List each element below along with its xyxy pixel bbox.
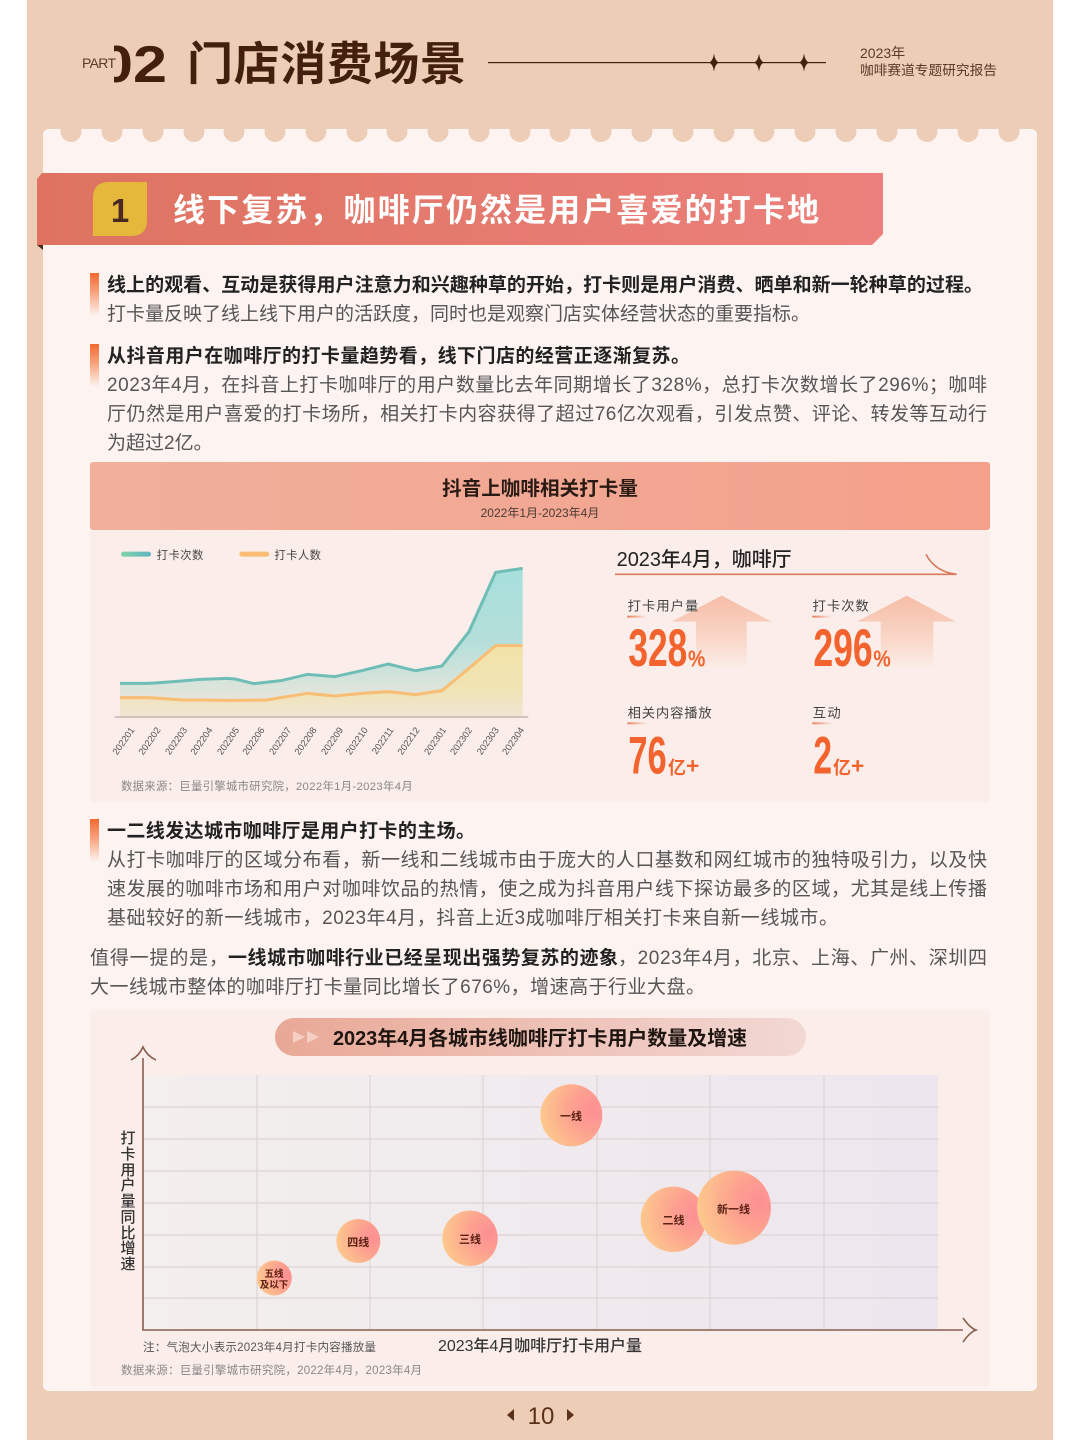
stat: content plays: 76 [628,726,667,785]
section number: PART [82,55,116,71]
section banner [37,173,883,250]
x axis labels: 202302 [448,725,474,757]
x axis label: 2023年4月咖啡厅打卡用户量 [438,1337,642,1355]
header [80,36,997,94]
bubble: tier 2: 二线 [662,1213,684,1227]
paragraph 2: 为超过2亿。 [107,432,213,454]
key figures [615,548,957,785]
x axis labels: 202204 [189,725,215,757]
bubble chart title: 2023年4月各城市线咖啡厅打卡用户数量及增速 [333,1026,747,1050]
y axis label: 用 [120,1162,136,1179]
y axis label: 户 [120,1177,136,1194]
chart header: 2022年1月-2023年4月 [481,506,599,520]
y axis label: 同 [120,1209,136,1226]
x axis labels: 202209 [319,725,345,757]
banner title: 线下复苏，咖啡厅仍然是用户喜爱的打卡地 [173,192,819,228]
stat: interactions: 2 [813,726,832,785]
stat: check-in users: % [688,646,706,672]
legend: 打卡人数 [274,548,321,562]
bubble chart title [275,1018,806,1056]
paragraph 4: 一线城市咖啡行业已经呈现出强势复苏的迹象 [228,946,618,969]
paragraph 1: 线上的观看、互动是获得用户注意力和兴趣种草的开始，打卡则是用户消费、晒单和新一轮种草的过程。 [107,273,983,296]
stat: check-in users: 328 [628,619,687,678]
axes with arrows [131,1047,976,1342]
y axis label: 比 [120,1225,136,1242]
stat: interactions: 亿 [833,758,851,778]
data source: 数据来源：巨量引擎城市研究院，2022年1月-2023年4月 [121,779,413,793]
stat: interactions: 互动 [813,705,841,720]
bubble: new tier 1: 新一线 [717,1202,750,1216]
bubble: tier 5 and below [257,1260,292,1296]
x axis labels: 202207 [267,725,293,757]
legend: 打卡次数 [157,548,203,562]
paragraph 4 [90,946,987,998]
report name [860,45,997,78]
bubble: tier 3 [442,1211,498,1266]
badge number [93,182,147,236]
bubble: tier 1: 一线 [560,1109,582,1123]
chart panel: bubble chart [90,1010,990,1386]
plot grid [143,1075,938,1330]
header line with stars [488,54,826,72]
paragraph 2: 厅仍然是用户喜爱的打卡场所，相关打卡内容获得了超过76亿次观看，引发点赞、评论、转发等互动行 [107,403,987,425]
arrow 2 [857,596,956,670]
x axis labels: 202303 [475,725,501,757]
paragraph 1: 打卡量反映了线上线下用户的活跃度，同时也是观察门店实体经营状态的重要指标。 [107,303,810,325]
figures heading [615,548,957,574]
figures heading: 2023年4月，咖啡厅 [617,548,792,571]
line chart [111,548,528,793]
paragraph 4: ，2023年4月，北京、上海、广州、深圳四 [618,947,987,969]
x axis labels: 202304 [500,725,526,757]
stat: interactions: + [851,753,864,778]
x axis labels: 202301 [422,725,448,757]
x axis labels: 202208 [293,725,319,757]
x axis labels: 202203 [163,725,189,757]
stat: check-in count: 打卡次数 [813,599,869,614]
bubble: tier 5 and below: 及以下 [260,1280,289,1291]
x axis labels: 202201 [111,725,137,757]
x axis labels: 202210 [344,725,370,757]
stat: check-in count: % [873,646,891,672]
x axis labels: 202211 [370,725,396,756]
stat: content plays: 相关内容播放 [628,704,712,720]
chart header [90,462,990,530]
chart panel: check-in volume [90,462,990,802]
bubble: tier 4 [336,1219,380,1263]
paragraph 1 [90,273,983,325]
paragraph 4: 值得一提的是， [90,947,228,969]
y axis label: 卡 [120,1146,136,1163]
y axis label: 增 [120,1239,136,1257]
arrow 1 [672,596,772,670]
x axis labels: 202202 [137,725,163,757]
page number [507,1403,574,1430]
chart header: 抖音上咖啡相关打卡量 [442,477,638,500]
paragraph 4: 大一线城市整体的咖啡厅打卡量同比增长了676%，增速高于行业大盘。 [90,976,705,998]
paragraph 3: 速发展的咖啡市场和用户对咖啡饮品的热情，使之成为抖音用户线下探访最多的区域，尤其是线上传播 [107,878,987,900]
paragraph 3: 从打卡咖啡厅的区域分布看，新一线和二线城市由于庞大的人口基数和网红城市的独特吸引力，以及快 [107,849,987,871]
page number: 10 [528,1403,554,1430]
paragraph 2: 从抖音用户在咖啡厅的打卡量趋势看，线下门店的经营正逐渐复苏。 [107,344,690,367]
badge number: 1 [111,192,129,229]
bubble note: 注：气泡大小表示2023年4月打卡内容播放量 [143,1340,376,1354]
x axis labels [111,725,526,757]
report name: 咖啡赛道专题研究报告 [860,63,997,78]
stat: check-in users [627,598,706,678]
stat: content plays: + [686,753,699,778]
bubble data source: 数据来源：巨量引擎城市研究院，2022年4月，2023年4月 [121,1363,422,1377]
paragraph 2: 2023年4月，在抖音上打卡咖啡厅的用户数量比去年同期增长了328%，总打卡次数增长了296%；咖啡 [107,374,987,396]
report name: 2023年 [860,45,905,61]
section number: 02 [99,36,167,94]
paragraph 3 [90,819,987,929]
legend [121,548,321,562]
stat: content plays [627,704,712,785]
x axis labels: 202205 [215,725,241,757]
bubble: tier 5 and below: 五线 [264,1268,284,1280]
y axis label: 打 [120,1130,136,1147]
stat: check-in count [812,599,891,678]
x axis labels: 202206 [241,725,267,757]
stat: interactions [812,705,864,785]
paragraph 3: 一二线发达城市咖啡厅是用户打卡的主场。 [107,819,475,842]
paragraph 3: 基础较好的新一线城市，2023年4月，抖音上近3成咖啡厅相关打卡来自新一线城市。 [107,907,838,929]
bubble: tier 1 [540,1084,602,1146]
paragraph 2 [90,344,987,454]
bubble: tier 2 [641,1187,706,1252]
stat: check-in users: 打卡用户量 [628,598,698,614]
title: 门店消费场景 [187,38,466,90]
x axis labels: 202212 [396,725,422,757]
bubble: new tier 1 [697,1171,771,1245]
y axis label: 量 [120,1193,136,1210]
section number [80,36,167,94]
y axis label: 速 [120,1256,136,1273]
stat: content plays: 亿 [668,758,686,778]
stat: check-in count: 296 [813,619,873,678]
y axis label [120,1130,136,1273]
bubble: tier 3: 三线 [459,1232,481,1246]
bubble: tier 4: 四线 [347,1235,369,1249]
